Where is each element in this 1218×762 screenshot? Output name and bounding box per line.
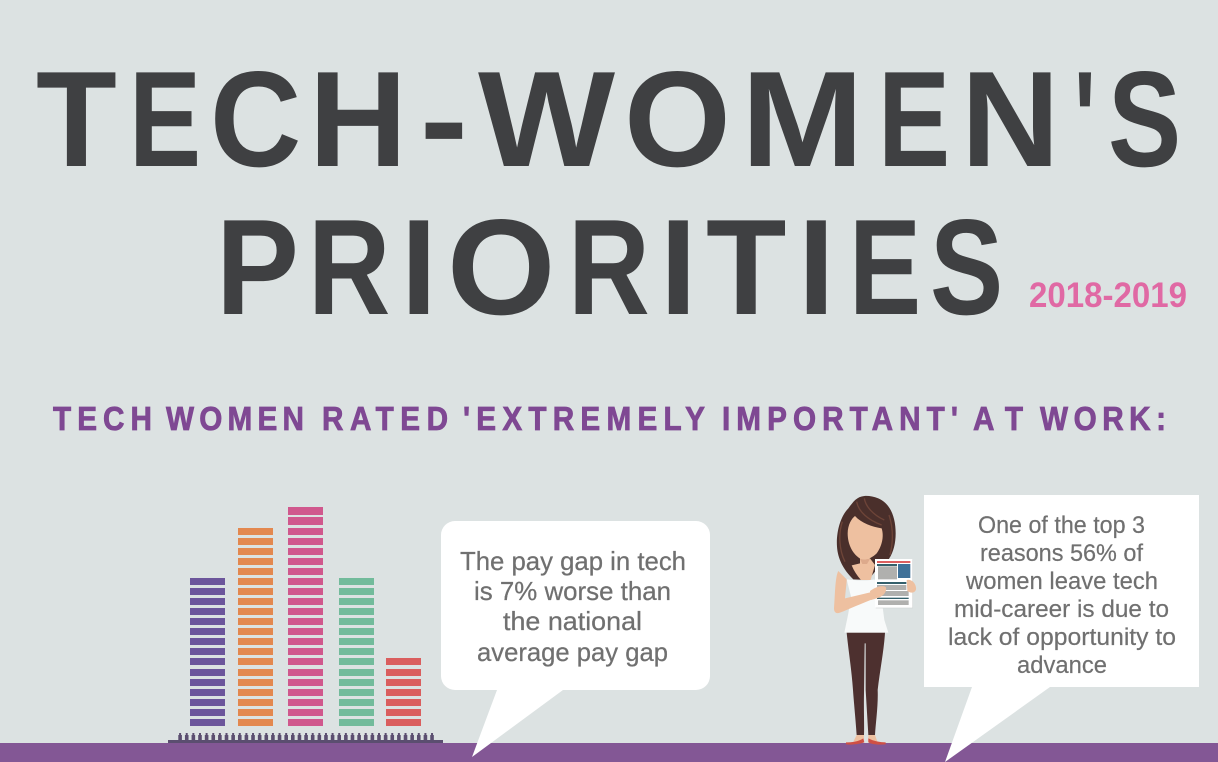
subtitle: WORK: <box>1040 401 1166 437</box>
ground band <box>0 743 1218 762</box>
shoes <box>846 738 886 745</box>
title: I <box>798 191 835 343</box>
title: S <box>930 191 1003 343</box>
hair <box>837 496 896 580</box>
leaving tech text: advance <box>1017 652 1107 679</box>
title: E <box>849 191 921 343</box>
title: H <box>309 43 407 195</box>
title: O <box>447 191 556 343</box>
pay gap text: the national <box>503 606 642 636</box>
subtitle: RATED <box>322 401 448 437</box>
bar chart <box>190 507 421 726</box>
title: T <box>36 43 116 195</box>
report <box>875 559 913 608</box>
title: S <box>1108 43 1181 195</box>
speech bubble: pay gap <box>441 521 710 757</box>
title <box>36 43 1181 343</box>
subtitle: WOMEN <box>166 401 304 437</box>
speech bubble: leaving tech <box>924 495 1199 762</box>
subtitle: TECH <box>53 401 152 437</box>
bar: purple <box>190 578 225 726</box>
chest and neck <box>852 558 875 580</box>
leaving tech text: One of the top 3 <box>978 512 1145 539</box>
leaving tech text <box>948 512 1176 679</box>
face <box>848 516 883 560</box>
title: O <box>624 43 731 195</box>
leaving tech text: reasons 56% of <box>980 540 1143 567</box>
title: - <box>420 43 468 195</box>
title: E <box>129 43 201 195</box>
feet <box>853 735 878 742</box>
year label: 2018-2019 <box>1029 276 1187 315</box>
title: N <box>961 43 1060 195</box>
pay gap text: is 7% worse than <box>474 576 671 606</box>
bar: green <box>339 578 374 726</box>
title: R <box>568 191 650 343</box>
hair highlights <box>840 498 892 562</box>
subtitle: AT <box>973 401 1023 437</box>
hands <box>870 580 916 600</box>
title: I <box>401 191 437 343</box>
title: M <box>741 43 864 195</box>
upper body <box>834 496 916 633</box>
title: P <box>216 191 299 343</box>
leaving tech text: women leave tech <box>965 568 1158 595</box>
title: C <box>210 43 302 195</box>
bar: pink <box>288 507 323 726</box>
top <box>844 579 888 633</box>
bar: red <box>386 658 421 726</box>
subtitle: IMPORTANT' <box>722 401 958 437</box>
pay gap text <box>460 546 686 667</box>
left arm <box>834 571 875 613</box>
bar: orange <box>238 528 273 726</box>
subtitle: 'EXTREMELY <box>463 401 705 437</box>
leaving tech text: lack of opportunity to <box>948 624 1176 651</box>
icon: woman holding report <box>834 496 916 745</box>
title: W <box>478 43 615 195</box>
leggings <box>847 633 885 735</box>
title: R <box>308 191 391 343</box>
title: E <box>878 43 950 195</box>
title: ' <box>1074 43 1096 195</box>
title: I <box>660 191 697 343</box>
lower body <box>846 633 886 745</box>
comb base <box>168 734 443 743</box>
leaving tech text: mid-career is due to <box>954 596 1169 623</box>
title: T <box>706 191 787 343</box>
pay gap text: The pay gap in tech <box>460 546 686 576</box>
pay gap text: average pay gap <box>477 637 668 667</box>
